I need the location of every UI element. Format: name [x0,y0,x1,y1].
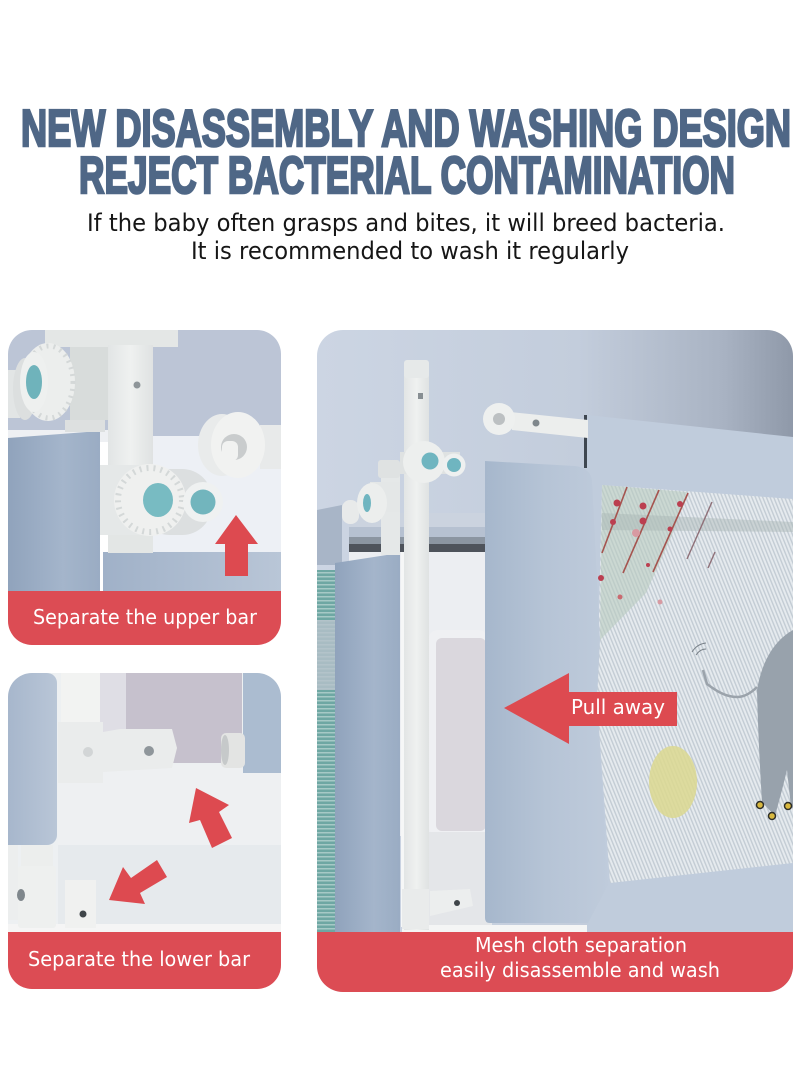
icon: detached ring [198,412,281,478]
side pads [8,673,57,845]
icon: post knobs [342,441,473,916]
arrow: down-left [109,860,167,904]
bottom pad [103,552,281,594]
caption band [8,932,281,989]
subtitle text: If the baby often grasps and bites, it will breed bacteria. [87,209,725,237]
mesh panel with fabric [584,415,793,932]
subtitle text: It is recommended to wash it regularly [191,237,629,265]
top bar and post [45,330,178,553]
yellow dot [649,746,697,818]
vertical post [401,360,429,930]
panel: pull away mesh [317,330,793,992]
red marks [598,487,715,604]
lower bracket [17,880,96,924]
caption band [317,932,793,992]
panel: separate the upper bar [8,330,281,645]
left wall panel [317,505,342,565]
rail [349,527,485,552]
caption band [8,591,281,645]
left mesh and pad [317,553,400,932]
elephant [757,630,793,816]
side pad [8,431,100,592]
caption band: Mesh cloth separation [475,933,687,957]
front pad [485,461,608,923]
panel: separate the lower bar [0,673,281,989]
subtitle text [87,209,725,265]
caption band: Separate the lower bar [28,947,251,971]
arrow: up-left [189,788,232,848]
elephant tail [703,670,757,697]
caption band: Separate the upper bar [33,605,258,629]
caption band: easily disassemble and wash [440,958,720,982]
icon: upper knob [8,343,75,421]
arrow: pull away: Pull away [571,695,665,719]
room behind [349,551,592,933]
small post [370,460,400,555]
elephant feet [756,802,792,820]
icon: lower knob [100,464,223,536]
upper bracket [83,722,245,768]
arrow: up [215,515,258,576]
title [21,100,791,205]
arrow: pull away [504,673,677,744]
top connector [483,403,588,438]
